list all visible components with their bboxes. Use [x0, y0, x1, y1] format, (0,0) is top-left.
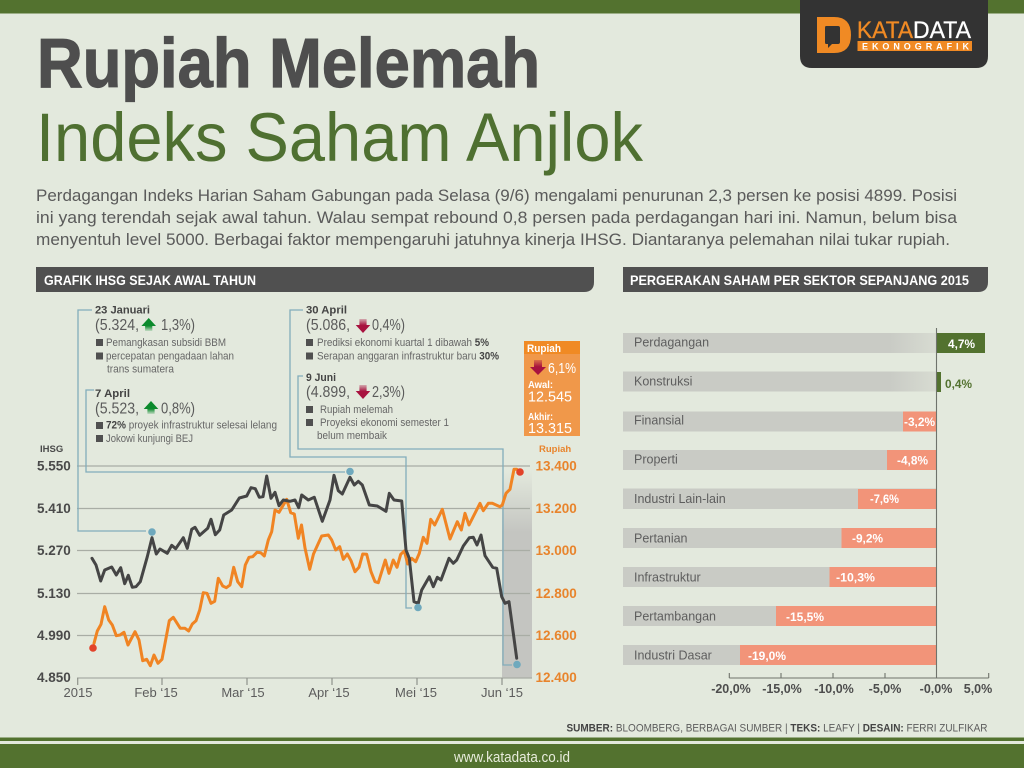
callout: 30 April: (5.086,: [306, 317, 350, 334]
month labels: Feb ‘15: [134, 685, 178, 700]
row: Perdagangan: Perdagangan: [634, 336, 709, 350]
callout: 30 April: [306, 304, 499, 362]
icon: green up arrow: [141, 318, 156, 331]
row: Finansial: -3,2%: [904, 415, 935, 429]
right axis labels: 12.800: [536, 586, 577, 601]
intro paragraph: menyentuh level 5000. Berbagai faktor mempengaruhi jatuhnya kinerja IHSG. Diantaranya pelemahan nilai tukar rupiah.: [36, 230, 950, 249]
left axis labels: IHSG: [40, 444, 63, 455]
callout: 23 Januari: trans sumatera: [107, 364, 175, 376]
intro paragraph: [36, 186, 958, 249]
callout: 7 April: 72% proyek infrastruktur selesai lelang: [106, 420, 277, 432]
row: Properti: -4,8%: [897, 454, 928, 468]
callout: 9 Juni: 2,3%): [372, 384, 405, 401]
logo: Katadata Ekonografik: [800, 0, 988, 68]
axis labels: -15,0%: [762, 682, 802, 696]
right axis labels: Rupiah: [539, 444, 571, 455]
callout: 23 Januari: Pemangkasan subsidi BBM: [106, 337, 226, 349]
title: [36, 24, 643, 176]
row: Pertambangan: -15,5%: [786, 610, 824, 624]
title: Rupiah Melemah: [37, 24, 540, 102]
month labels: [64, 685, 523, 700]
panel heading: IHSG chart: GRAFIK IHSG SEJAK AWAL TAHUN: [44, 273, 256, 288]
right axis labels: 12.400: [536, 670, 577, 685]
callout: 23 Januari: [95, 304, 234, 376]
row: Properti: Properti: [634, 453, 678, 467]
June shaded area: [502, 470, 532, 678]
title: Indeks Saham Anjlok: [36, 99, 643, 176]
right axis labels: [536, 444, 577, 685]
marker dots: [89, 468, 524, 668]
axis labels: 5,0%: [964, 682, 992, 696]
callout: 23 Januari: (5.324,: [95, 317, 139, 334]
row: Pertanian: -9,2%: [852, 532, 883, 546]
row: Properti: [623, 450, 937, 470]
left axis labels: 4.850: [37, 670, 71, 685]
right axis labels: 13.000: [536, 543, 577, 558]
callout: 23 Januari: 1,3%): [161, 317, 195, 334]
source credits: SUMBER: BLOOMBERG, BERBAGAI SUMBER | TEKS: LEAFY | DESAIN: FERRI ZULFIKAR: [566, 722, 988, 734]
panel heading: IHSG chart: [36, 267, 594, 292]
top green band: [0, 0, 1024, 14]
callout: 7 April: (5.523,: [95, 400, 139, 418]
row: Industri Lain-lain: [623, 488, 937, 509]
rupiah summary box: 6,1%: [548, 360, 576, 377]
axis labels: -20,0%: [711, 682, 751, 696]
row: Infrastruktur: [623, 567, 937, 587]
callout: 9 Juni: Rupiah melemah: [320, 404, 393, 416]
icon: red down arrow: [356, 319, 370, 333]
callout: 30 April: Serapan anggaran infrastruktur baru 30%: [317, 350, 499, 362]
icon: red down arrow: [356, 385, 370, 399]
callout: 23 Januari: percepatan pengadaan lahan: [106, 350, 234, 362]
left axis labels: [37, 444, 71, 685]
rupiah summary box: 13.315: [528, 420, 572, 437]
row: Finansial: Finansial: [634, 414, 684, 428]
logo wordmark: EKONOGRAFIK: [862, 42, 970, 52]
row: Pertambangan: Pertambangan: [634, 610, 716, 624]
intro paragraph: ini yang terendah sejak awal tahun. Walau sempat rebound 0,8 persen pada perdagangan hari ini. Namun, belum bisa: [36, 208, 958, 227]
left axis labels: 5.130: [37, 586, 71, 601]
month labels: Apr ‘15: [308, 685, 350, 700]
row: Pertambangan: [623, 606, 937, 626]
rupiah summary box: [524, 341, 580, 437]
month labels: Mar ‘15: [221, 685, 265, 700]
month labels: Mei ‘15: [395, 685, 437, 700]
callout: 23 Januari: 23 Januari: [95, 304, 150, 316]
left axis labels: 5.410: [37, 501, 71, 516]
row: Konstruksi: 0,4%: [945, 377, 972, 391]
rupiah summary box: 12.545: [528, 388, 572, 406]
callout: 9 Juni: (4.899,: [306, 384, 350, 401]
callout: 7 April: 7 April: [95, 388, 130, 400]
row: Industri Dasar: [623, 645, 937, 665]
row: Industri Dasar: Industri Dasar: [634, 649, 712, 663]
month labels: Jun ‘15: [481, 685, 523, 700]
callout: 7 April: [95, 388, 277, 445]
row: Konstruksi: [623, 372, 972, 392]
axis labels: -0,0%: [920, 682, 952, 696]
footer band: www.katadata.co.id: [453, 749, 570, 766]
callout: 9 Juni: 9 Juni: [306, 372, 336, 384]
callout: 30 April: Prediksi ekonomi kuartal 1 dibawah 5%: [317, 337, 489, 349]
panel heading: sector movement: PERGERAKAN SAHAM PER SEKTOR SEPANJANG 2015: [630, 273, 969, 288]
callout: 30 April: 0,4%): [372, 317, 405, 334]
IHSG line: [92, 475, 517, 658]
gridlines: [77, 466, 532, 685]
callout: 9 Juni: Proyeksi ekonomi semester 1: [320, 417, 449, 429]
callout: 7 April: 0,8%): [161, 400, 195, 418]
callout: 30 April: 30 April: [306, 304, 347, 316]
panel heading: sector movement: [623, 267, 988, 292]
callout leader lines: [78, 310, 512, 665]
callout: 7 April: Jokowi kunjungi BEJ: [106, 433, 193, 445]
right axis labels: 13.400: [536, 458, 577, 474]
axis: [729, 328, 989, 678]
rupiah summary box: Awal:: [528, 380, 553, 391]
row: Perdagangan: 4,7%: [948, 337, 975, 351]
row: Industri Lain-lain: -7,6%: [870, 492, 899, 506]
left axis labels: 4.990: [37, 628, 71, 643]
rupiah line: [94, 469, 517, 666]
left axis labels: 5.550: [37, 458, 71, 474]
axis labels: [711, 682, 992, 696]
axis labels: -10,0%: [814, 682, 854, 696]
row: Pertanian: Pertanian: [634, 532, 688, 546]
icon: orange D with speech bubble: [817, 17, 851, 53]
logo wordmark: [857, 17, 972, 52]
row: Industri Dasar: -19,0%: [748, 649, 786, 663]
month labels: 2015: [64, 685, 92, 700]
panel: IHSG line chart: [37, 310, 577, 700]
logo wordmark: KATA: [857, 17, 913, 44]
rupiah summary box: Rupiah: [527, 343, 561, 355]
row: Pertanian: [623, 528, 937, 548]
right axis labels: 12.600: [536, 628, 577, 643]
row: Infrastruktur: Infrastruktur: [634, 571, 701, 585]
panel: sector bar chart: [623, 328, 992, 696]
row: Perdagangan: [623, 333, 985, 353]
intro paragraph: Perdagangan Indeks Harian Saham Gabungan pada Selasa (9/6) mengalami penurunan 2,3 persen ke posisi 4899. Posisi: [36, 186, 957, 205]
callout: 9 Juni: belum membaik: [317, 430, 387, 442]
row: Konstruksi: Konstruksi: [634, 375, 692, 389]
icon: red down arrow: [530, 360, 546, 375]
logo wordmark: DATA: [913, 17, 971, 44]
left axis labels: 5.270: [37, 543, 71, 558]
callout: 9 Juni: [306, 372, 449, 442]
row: Finansial: [623, 412, 937, 432]
row: Industri Lain-lain: Industri Lain-lain: [634, 492, 726, 506]
right axis labels: 13.200: [536, 501, 577, 516]
rupiah summary box: Akhir:: [528, 412, 553, 423]
icon: green up arrow: [144, 401, 158, 414]
axis labels: -5,0%: [869, 682, 901, 696]
footer band: [0, 738, 1024, 768]
row: Infrastruktur: -10,3%: [836, 570, 875, 584]
